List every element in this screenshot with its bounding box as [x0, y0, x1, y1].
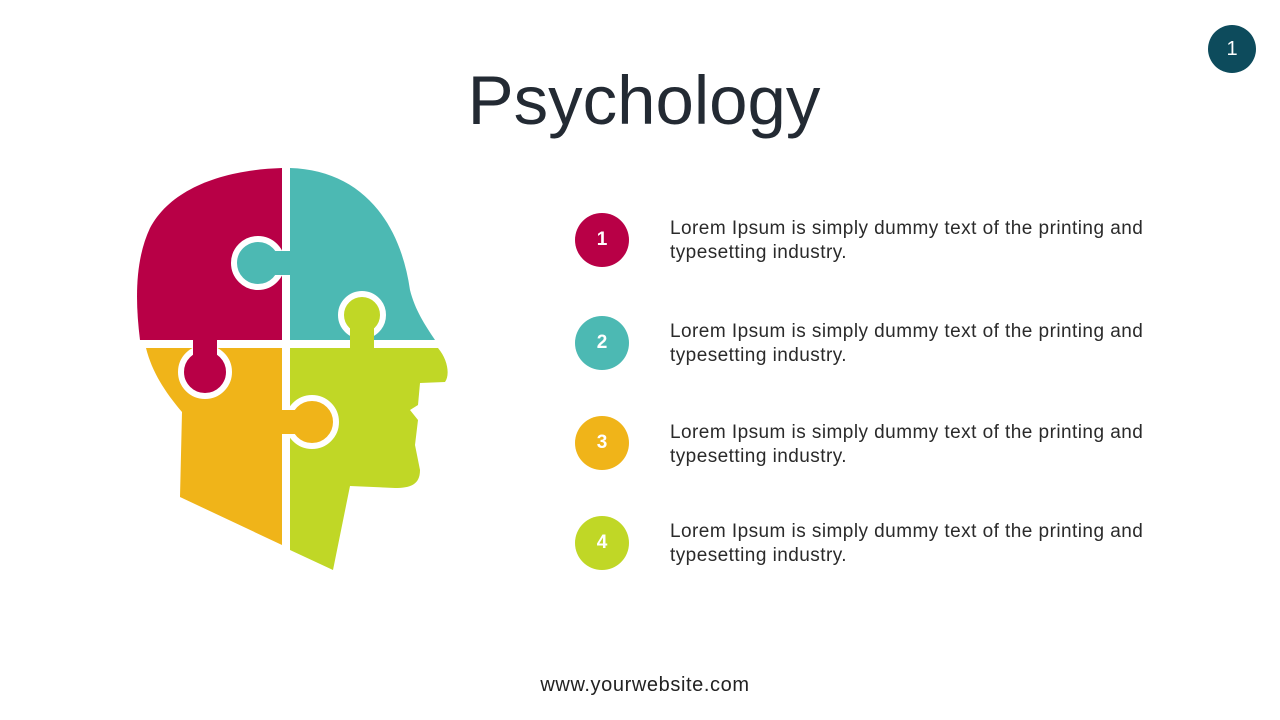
item 2 — [575, 316, 1143, 370]
text: 1 — [597, 229, 607, 250]
tab: magenta into yellow — [181, 338, 229, 396]
text: Lorem Ipsum is simply dummy text of the printing and typesetting industry. — [670, 422, 1143, 467]
text: 4 — [597, 532, 607, 553]
piece: yellow — [146, 348, 282, 545]
page badge — [1208, 25, 1256, 73]
piece: green — [290, 348, 448, 570]
text: Lorem Ipsum is simply dummy text of the printing and typesetting industry. — [670, 321, 1143, 366]
tab: yellow into green — [280, 398, 336, 446]
piece: magenta — [137, 168, 282, 340]
text: 2 — [597, 332, 607, 353]
page badge: 1 — [1226, 38, 1238, 60]
title: Psychology — [468, 62, 820, 139]
item 1 — [575, 213, 1143, 267]
item 3 — [575, 416, 1143, 470]
piece: teal — [290, 168, 435, 340]
text: 3 — [597, 432, 607, 453]
tab: green into teal — [341, 294, 383, 350]
item 4 — [575, 516, 1143, 570]
text: Lorem Ipsum is simply dummy text of the printing and typesetting industry. — [670, 521, 1143, 566]
tab: teal into magenta — [234, 239, 290, 287]
footer url: www.yourwebsite.com — [540, 674, 750, 696]
text: Lorem Ipsum is simply dummy text of the printing and typesetting industry. — [670, 218, 1143, 263]
